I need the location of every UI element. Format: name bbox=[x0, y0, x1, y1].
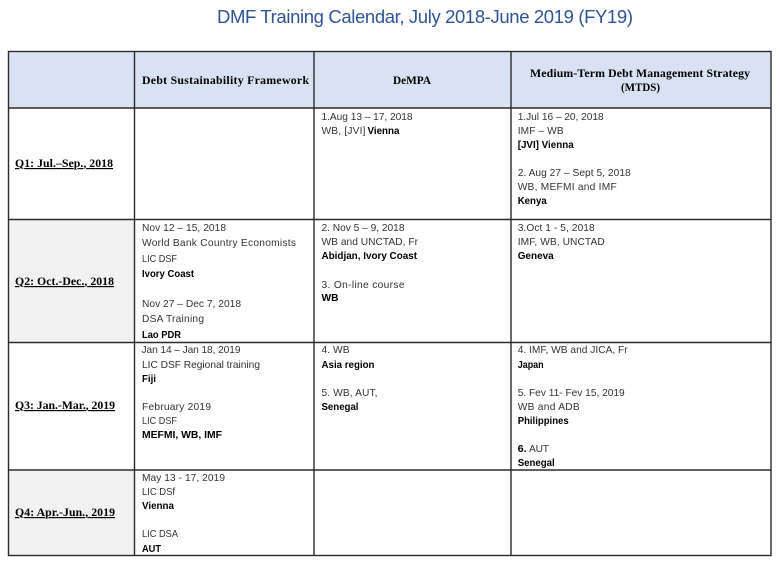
cell: Q1 MTDS bbox=[518, 112, 631, 207]
column header: MTDS bbox=[530, 66, 750, 94]
cell: Q3 MTDS bbox=[518, 345, 628, 469]
cell: Q3 DeMPA: 4. WB bbox=[322, 345, 350, 356]
cell: Q2 Debt Sustainability Framework: Lao PDR bbox=[142, 330, 182, 341]
cell: Q4 Debt Sustainability Framework bbox=[142, 473, 225, 555]
Q2 row shading bbox=[9, 220, 134, 342]
cell: Q1 MTDS: 1.Jul 16 – 20, 2018 bbox=[518, 112, 604, 123]
cell: Q2 MTDS bbox=[518, 223, 605, 262]
title: DMF Training Calendar, July 2018-June 2019 (FY19) bbox=[217, 6, 633, 27]
cell: Q1 DeMPA bbox=[322, 112, 413, 137]
cell: Q3 MTDS: 4. IMF, WB and JICA, Fr bbox=[518, 345, 628, 356]
cell: Q2 MTDS: Geneva bbox=[518, 251, 554, 262]
row label: Q3: Q3: Jan.-Mar., 2019 bbox=[15, 398, 115, 412]
cell: Q3 Debt Sustainability Framework bbox=[142, 345, 260, 441]
cell: Q2 DeMPA: 2. Nov 5 – 9, 2018 bbox=[322, 223, 405, 234]
cell: Q2 MTDS: 3.Oct 1 - 5, 2018 bbox=[518, 223, 595, 234]
cell: Q1 MTDS: 2. Aug 27 – Sept 5, 2018 bbox=[518, 168, 631, 179]
cell: Q2 DeMPA: WB and UNCTAD, Fr bbox=[322, 237, 419, 248]
column header: MTDS: (MTDS) bbox=[621, 80, 660, 94]
cell: Q3 DeMPA bbox=[322, 345, 378, 413]
cell: Q1 MTDS: IMF – WB bbox=[518, 126, 564, 137]
Q4 row shading bbox=[9, 471, 134, 555]
cell: Q2 Debt Sustainability Framework: LIC DSF bbox=[142, 254, 177, 265]
row label: Q4: Q4: Apr.-Jun., 2019 bbox=[15, 505, 115, 519]
cell: Q2 DeMPA bbox=[322, 223, 419, 304]
cell: Q3 Debt Sustainability Framework: LIC DSF bbox=[142, 416, 177, 427]
cell: Q3 Debt Sustainability Framework: LIC DSF Regional training bbox=[142, 360, 260, 371]
cell: Q1 DeMPA: Vienna bbox=[368, 126, 400, 137]
cell: Q4 Debt Sustainability Framework: AUT bbox=[142, 544, 162, 555]
cell: Q3 Debt Sustainability Framework: Fiji bbox=[142, 374, 156, 385]
cell: Q4 Debt Sustainability Framework: LIC DSA bbox=[142, 529, 178, 540]
cell: Q4 Debt Sustainability Framework: May 13 - 17, 2019 bbox=[142, 473, 225, 484]
header row background bbox=[9, 52, 770, 108]
cell: Q2 DeMPA: Abidjan, Ivory Coast bbox=[322, 251, 418, 262]
cell: Q3 MTDS: 5. Fev 11- Fev 15, 2019 bbox=[518, 388, 625, 399]
cell: Q3 MTDS: 6. bbox=[518, 444, 527, 455]
cell: Q3 MTDS: AUT bbox=[529, 444, 549, 455]
cell: Q2 Debt Sustainability Framework: Nov 27 – Dec 7, 2018 bbox=[142, 299, 241, 310]
cell: Q2 MTDS: IMF, WB, UNCTAD bbox=[518, 237, 605, 248]
cell: Q1 DeMPA: 1.Aug 13 – 17, 2018 bbox=[322, 112, 413, 123]
cell: Q2 Debt Sustainability Framework: World Bank Country Economists bbox=[142, 238, 296, 249]
cell: Q2 Debt Sustainability Framework: Nov 12 – 15, 2018 bbox=[142, 223, 226, 234]
cell: Q3 Debt Sustainability Framework: February 2019 bbox=[142, 402, 211, 413]
cell: Q2 DeMPA: WB bbox=[322, 293, 338, 304]
row label: Q2: Q2: Oct.-Dec., 2018 bbox=[15, 274, 114, 288]
cell: Q3 Debt Sustainability Framework: MEFMI, WB, IMF bbox=[142, 430, 222, 441]
cell: Q3 Debt Sustainability Framework: Jan 14 – Jan 18, 2019 bbox=[142, 345, 241, 356]
column header: DeMPA: DeMPA bbox=[393, 73, 431, 87]
cell: Q2 Debt Sustainability Framework: Ivory Coast bbox=[142, 269, 195, 280]
cell: Q1 MTDS: [JVI] Vienna bbox=[518, 140, 574, 151]
cell: Q3 MTDS: WB and ADB bbox=[518, 402, 580, 413]
cell: Q3 MTDS: Senegal bbox=[518, 458, 555, 469]
cell: Q4 Debt Sustainability Framework: Vienna bbox=[142, 501, 174, 512]
cell: Q1 MTDS: WB, MEFMI and IMF bbox=[518, 182, 617, 193]
cell: Q3 MTDS: Japan bbox=[518, 360, 544, 371]
cell: Q1 MTDS: Kenya bbox=[518, 196, 547, 207]
cell: Q3 MTDS: Philippines bbox=[518, 416, 569, 427]
column header: MTDS: Medium-Term Debt Management Strategy bbox=[530, 66, 750, 80]
column header: Debt Sustainability Framework: Debt Sustainability Framework bbox=[142, 73, 309, 87]
cell: Q1 DeMPA: WB, [JVI] bbox=[322, 126, 366, 137]
cell: Q2 DeMPA: 3. On-line course bbox=[322, 280, 405, 291]
cell: Q2 Debt Sustainability Framework bbox=[142, 223, 296, 341]
cell: Q4 Debt Sustainability Framework: LIC DSf bbox=[142, 487, 175, 498]
cell: Q3 DeMPA: 5. WB, AUT, bbox=[322, 388, 378, 399]
cell: Q2 Debt Sustainability Framework: DSA Training bbox=[142, 314, 204, 325]
cell: Q3 DeMPA: Senegal bbox=[322, 402, 359, 413]
cell: Q3 DeMPA: Asia region bbox=[322, 360, 374, 371]
row label: Q1: Q1: Jul.–Sep., 2018 bbox=[15, 156, 113, 170]
